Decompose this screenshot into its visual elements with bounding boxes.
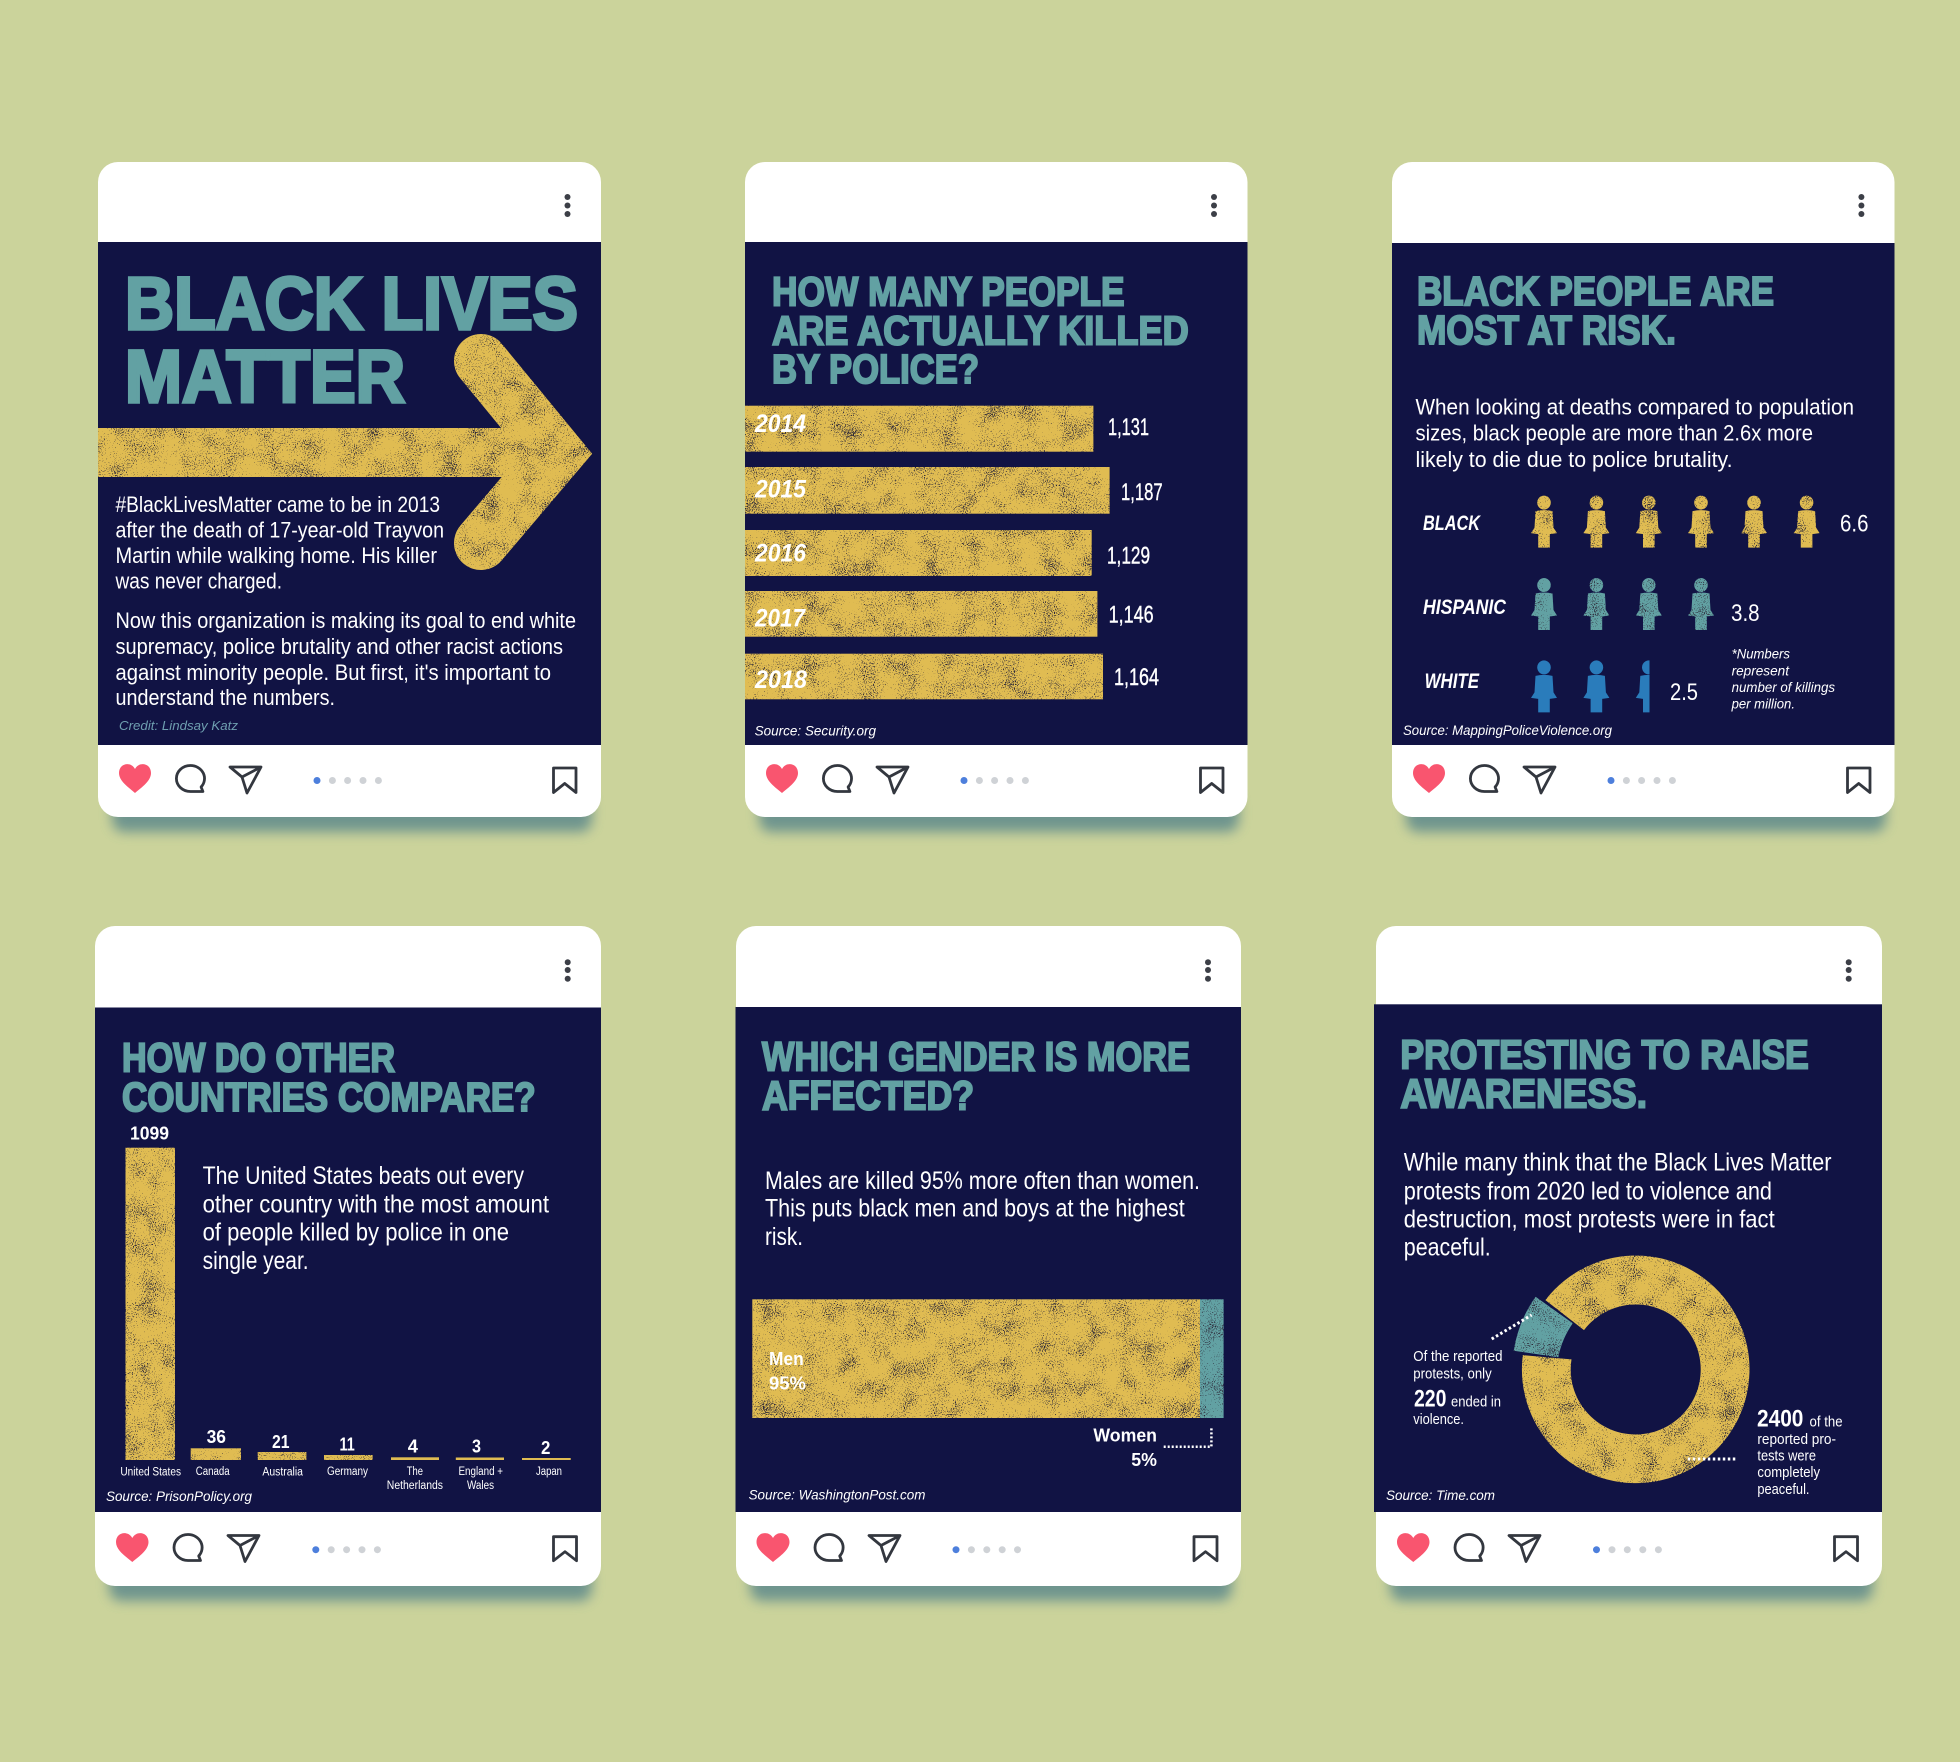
icon: heart	[116, 1533, 148, 1562]
icon: comment	[1455, 1534, 1483, 1560]
thin bars	[391, 1457, 571, 1460]
left annotation: ended in	[1451, 1394, 1501, 1411]
women label: Women	[1093, 1426, 1157, 1446]
row labels	[1423, 512, 1507, 693]
arrow	[98, 361, 557, 543]
icon: bookmark	[554, 768, 576, 792]
left annotation: protests, only	[1413, 1365, 1492, 1382]
women label	[1093, 1426, 1157, 1470]
values: 3.8	[1731, 600, 1760, 627]
icon: send	[228, 1536, 259, 1562]
menu dots	[1858, 194, 1864, 217]
values: 11	[340, 1435, 355, 1455]
body text: peaceful.	[1404, 1234, 1491, 1262]
values: 1,146	[1109, 602, 1154, 628]
paragraph two	[116, 608, 576, 710]
pagination dots	[952, 1546, 1021, 1553]
action bar	[119, 764, 576, 793]
body text: protests from 2020 led to violence and	[1404, 1177, 1772, 1205]
title	[772, 269, 1189, 392]
card 1: Black Lives Matter	[98, 162, 601, 832]
icon: send	[1509, 1536, 1540, 1562]
pagination dots	[960, 777, 1029, 784]
icon: bookmark	[1834, 1537, 1858, 1561]
white row icons	[1531, 660, 1662, 712]
right annotation	[1757, 1406, 1843, 1498]
title: PROTESTING TO RAISE	[1400, 1031, 1809, 1077]
icon: comment	[823, 765, 852, 792]
action bar	[756, 1533, 1217, 1562]
values: 2.5	[1670, 679, 1698, 706]
icon: bookmark	[554, 1537, 576, 1561]
country labels: United States	[120, 1467, 181, 1479]
title	[125, 262, 578, 418]
title	[762, 1034, 1190, 1118]
body text	[1416, 394, 1854, 472]
card 5: gender	[736, 926, 1241, 1601]
right annotation: peaceful.	[1757, 1481, 1810, 1498]
menu dots	[1846, 959, 1852, 982]
paragraph one: after the death of 17-year-old Trayvon	[116, 518, 444, 542]
values: 21	[272, 1432, 290, 1452]
body text: single year.	[203, 1247, 309, 1275]
paragraph two: Now this organization is making its goal to end white	[116, 608, 576, 633]
country labels: Japan	[536, 1466, 562, 1478]
menu dots	[1205, 959, 1211, 982]
year labels: 2018	[754, 666, 807, 694]
title: COUNTRIES COMPARE?	[122, 1074, 536, 1120]
action bar	[766, 764, 1223, 793]
year labels: 2017	[754, 605, 806, 633]
right annotation: reported pro-	[1757, 1431, 1836, 1448]
hispanic row icons	[1531, 578, 1714, 630]
row labels: HISPANIC	[1423, 596, 1507, 619]
dotted leaders	[1492, 1315, 1738, 1459]
right annotation: of the	[1810, 1414, 1843, 1431]
title: HOW DO OTHER	[122, 1035, 395, 1081]
source: Source: WashingtonPost.com	[749, 1486, 926, 1502]
body text	[1404, 1149, 1832, 1262]
title: AFFECTED?	[762, 1072, 974, 1118]
title	[1417, 268, 1774, 353]
values	[1107, 414, 1163, 691]
right annotation: completely	[1757, 1464, 1820, 1481]
body text: Males are killed 95% more often than women.	[765, 1167, 1200, 1195]
left annotation	[1413, 1348, 1502, 1428]
body text: When looking at deaths compared to population	[1416, 394, 1854, 420]
credit: Credit: Lindsay Katz	[119, 718, 239, 733]
pagination dots	[1593, 1546, 1662, 1553]
footnote: number of killings	[1732, 679, 1835, 695]
values: 1099	[130, 1123, 169, 1143]
menu dots	[1211, 194, 1217, 217]
icon: comment	[815, 1534, 843, 1560]
icon: send	[877, 767, 908, 793]
footnote	[1731, 646, 1835, 712]
icon: bookmark	[1200, 768, 1223, 792]
country labels: The	[407, 1466, 423, 1478]
pictogram chart	[1423, 496, 1868, 712]
values: 36	[207, 1427, 226, 1447]
pagination dots	[312, 1546, 381, 1553]
title: BY POLICE?	[772, 346, 979, 392]
title	[122, 1035, 536, 1120]
icon: send	[1524, 767, 1555, 793]
values: 1,129	[1107, 542, 1150, 570]
country labels: Germany	[327, 1466, 368, 1478]
icon: heart	[119, 764, 151, 793]
menu dots	[565, 959, 571, 982]
paragraph two: supremacy, police brutality and other racist actions	[116, 634, 563, 659]
stacked bar: men and women	[752, 1299, 1224, 1470]
row labels: WHITE	[1425, 670, 1480, 693]
footnote: represent	[1732, 663, 1790, 679]
title: BLACK PEOPLE ARE	[1417, 268, 1774, 314]
title: MATTER	[125, 335, 405, 418]
paragraph two: understand the numbers.	[116, 685, 335, 710]
title	[1400, 1031, 1809, 1117]
footnote: per million.	[1731, 696, 1795, 712]
icon: send	[230, 767, 261, 793]
action bar	[1397, 1533, 1858, 1562]
icon: heart	[1413, 764, 1445, 793]
men label: Men	[769, 1349, 804, 1369]
body text	[765, 1167, 1200, 1251]
paragraph one: was never charged.	[115, 568, 282, 594]
bars	[126, 1148, 373, 1460]
country labels: Canada	[196, 1466, 230, 1478]
icon: comment	[176, 765, 205, 792]
men label	[769, 1349, 806, 1393]
values: 4	[408, 1437, 418, 1457]
card 6: protesting	[1374, 926, 1882, 1601]
icon: comment	[1470, 765, 1499, 792]
peaceful segment	[1522, 1256, 1750, 1483]
title: MOST AT RISK.	[1417, 307, 1676, 353]
source: Source: PrisonPolicy.org	[106, 1488, 252, 1504]
bar segments	[752, 1299, 1224, 1418]
country labels: Australia	[262, 1467, 304, 1479]
black row icons	[1531, 496, 1820, 548]
icon: heart	[756, 1533, 790, 1562]
values: 6.6	[1840, 511, 1868, 538]
body text: other country with the most amount	[203, 1190, 549, 1218]
body text: of people killed by police in one	[203, 1219, 509, 1247]
dotted leader	[1164, 1427, 1211, 1447]
values	[1670, 511, 1868, 706]
icon: bookmark	[1848, 768, 1870, 792]
action bar	[1413, 764, 1870, 793]
source: Source: Time.com	[1386, 1487, 1495, 1503]
body text: The United States beats out every	[203, 1162, 524, 1190]
body text: While many think that the Black Lives Matter	[1404, 1149, 1832, 1177]
icon: bookmark	[1194, 1537, 1217, 1561]
icon: comment	[174, 1534, 202, 1560]
icon: heart	[766, 764, 798, 793]
body text: likely to die due to police brutality.	[1416, 447, 1732, 472]
paragraph one: #BlackLivesMatter came to be in 2013	[116, 492, 440, 517]
year labels: 2015	[754, 476, 807, 504]
year labels: 2016	[754, 540, 807, 568]
body text	[203, 1162, 549, 1275]
values: 3	[472, 1437, 481, 1457]
body text: destruction, most protests were in fact	[1404, 1205, 1775, 1233]
right annotation: tests were	[1757, 1448, 1816, 1465]
action bar	[116, 1533, 576, 1562]
title: WHICH GENDER IS MORE	[762, 1034, 1190, 1080]
paragraph one	[115, 492, 444, 594]
row labels: BLACK	[1423, 512, 1481, 535]
left annotation: Of the reported	[1413, 1348, 1502, 1365]
icon: send	[869, 1536, 900, 1562]
icon: heart	[1397, 1533, 1430, 1562]
year labels: 2014	[754, 410, 806, 438]
footnote: *Numbers	[1732, 646, 1790, 662]
paragraph two: against minority people. But first, it's important to	[116, 660, 551, 685]
title: AWARENESS.	[1400, 1071, 1647, 1117]
violent segment	[1514, 1297, 1573, 1357]
body text: risk.	[765, 1223, 803, 1251]
values: 2	[541, 1438, 550, 1458]
paragraph one: Martin while walking home. His killer	[116, 543, 437, 568]
body text: sizes, black people are more than 2.6x more	[1416, 420, 1813, 446]
year labels	[754, 410, 807, 694]
title: ARE ACTUALLY KILLED	[772, 308, 1189, 354]
card 4: other countries	[95, 926, 601, 1601]
pagination dots	[314, 777, 382, 784]
left annotation: violence.	[1413, 1411, 1464, 1428]
values: 1,131	[1108, 414, 1149, 441]
country labels: England +	[458, 1466, 503, 1478]
values: 1,164	[1114, 664, 1159, 691]
pagination dots	[1608, 777, 1676, 784]
men label: 95%	[769, 1373, 806, 1393]
menu dots	[564, 194, 570, 217]
source: Source: Security.org	[755, 723, 876, 739]
left annotation: 220	[1414, 1386, 1446, 1413]
country labels: Netherlands	[387, 1480, 443, 1492]
title: BLACK LIVES	[125, 262, 578, 345]
card 2: how many people	[745, 162, 1248, 832]
women label: 5%	[1131, 1450, 1157, 1470]
bar chart: countries	[120, 1123, 571, 1492]
donut chart	[1492, 1256, 1750, 1483]
body text: This puts black men and boys at the highest	[765, 1195, 1185, 1223]
bar chart: deaths per year	[745, 406, 1163, 699]
title: HOW MANY PEOPLE	[772, 269, 1124, 315]
card 3: black people most at risk	[1392, 162, 1894, 832]
source: Source: MappingPoliceViolence.org	[1403, 722, 1612, 738]
right annotation: 2400	[1757, 1406, 1803, 1433]
bars	[745, 406, 1110, 699]
country labels: Wales	[467, 1480, 494, 1492]
values: 1,187	[1121, 479, 1163, 506]
values	[130, 1123, 550, 1458]
country labels	[120, 1466, 562, 1492]
